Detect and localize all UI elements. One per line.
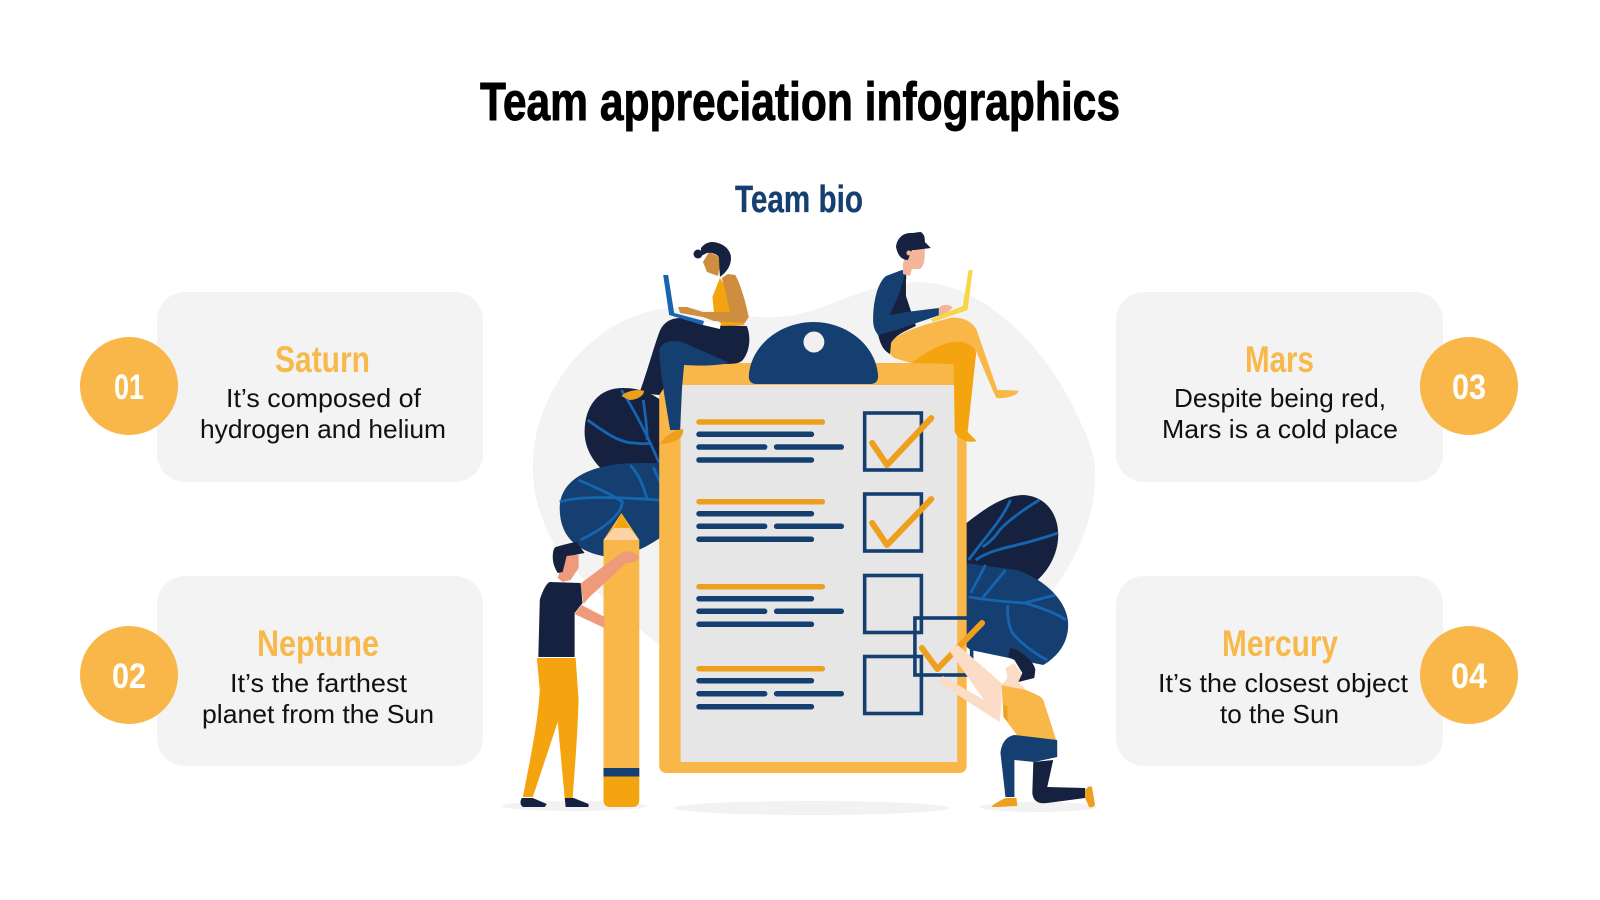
panel: saturn: Saturn <box>275 339 370 380</box>
panel: mercury: It’s the closest object <box>1158 668 1409 698</box>
panel: neptune: 02 <box>112 657 146 696</box>
panel: mars: Mars <box>1245 339 1314 380</box>
panel: mercury: to the Sun <box>1220 699 1339 729</box>
clipboard clip <box>749 322 878 384</box>
ground shadows <box>502 801 1097 815</box>
title: Team appreciation infographics <box>480 72 1120 132</box>
panel: neptune: Neptune <box>257 623 379 664</box>
panel: neptune: It’s the farthest <box>230 668 408 698</box>
panel: mercury: Mercury <box>1222 623 1338 664</box>
floating checkbox <box>915 618 982 675</box>
panel: saturn: 01 <box>114 368 144 407</box>
pencil <box>603 513 639 807</box>
left leaves <box>560 388 664 556</box>
panel: saturn <box>80 292 483 482</box>
check marks <box>872 418 931 545</box>
panel: neptune <box>80 576 483 766</box>
panel: mercury <box>1116 576 1518 766</box>
checkboxes <box>865 413 921 714</box>
panel: mars: 03 <box>1452 368 1486 407</box>
right leaves <box>958 495 1068 665</box>
panel: mars: Despite being red, <box>1174 383 1386 413</box>
panel: neptune: planet from the Sun <box>202 699 434 729</box>
person: kneeling man <box>939 645 1095 807</box>
panel: mars: Mars is a cold place <box>1162 414 1398 444</box>
subtitle: team bio: Team bio <box>735 179 863 221</box>
checklist text lines <box>699 422 841 707</box>
background blob <box>533 282 1095 650</box>
person: woman with laptop <box>621 242 749 444</box>
person: man with pencil <box>521 542 639 807</box>
panel: mars <box>1116 292 1518 482</box>
illustration: checklist with team <box>502 232 1097 815</box>
clipboard <box>659 322 967 773</box>
panel: saturn: It’s composed of <box>226 383 422 413</box>
panel: saturn: hydrogen and helium <box>200 414 446 444</box>
panel: mercury: 04 <box>1451 657 1487 696</box>
person: man with laptop <box>873 232 1018 442</box>
